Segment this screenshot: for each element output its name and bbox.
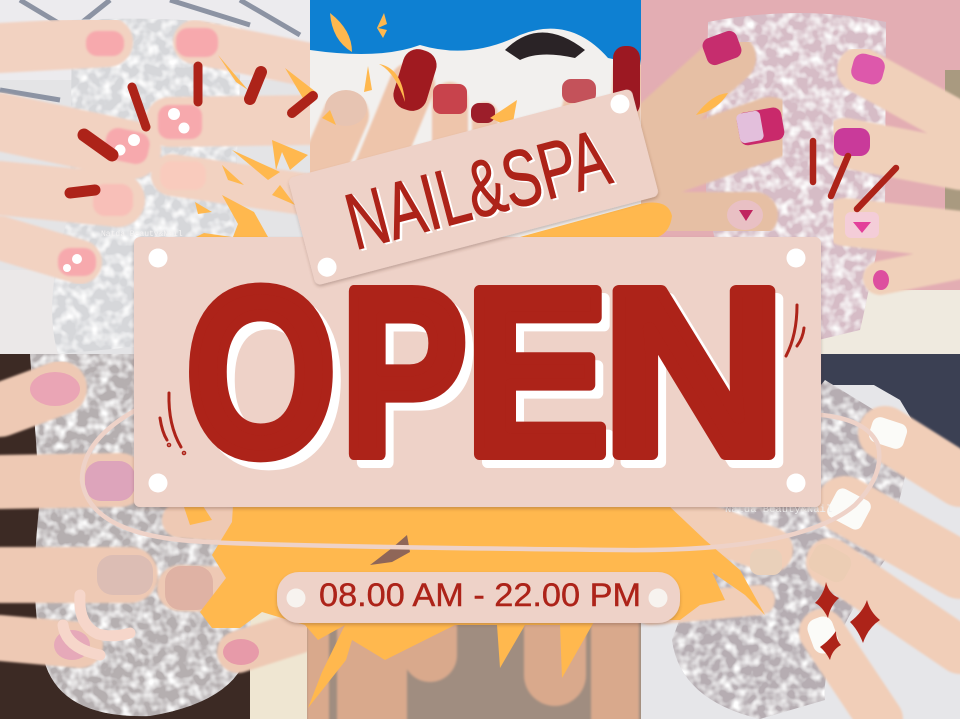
orange burst: behind hours pill	[184, 505, 765, 708]
red sparkles lower right	[815, 582, 880, 660]
photo: shimmer pink nails on dark background	[0, 354, 307, 719]
photo: deep red nails on blue and white	[310, 0, 641, 240]
heading shadow: OPEN: N	[610, 248, 794, 513]
main sign panel	[134, 237, 821, 507]
small sign: NAIL&SPA	[288, 88, 659, 286]
photo peek through burst	[370, 535, 410, 565]
hours pill	[277, 572, 680, 623]
orange burst: top leaves on photo	[330, 13, 728, 128]
photo: fingers on taupe fabric	[307, 623, 641, 719]
red accent strokes upper right	[813, 141, 896, 209]
photo: pink blush nails with flowers	[0, 0, 310, 354]
watermark text lower right: Natda Beauty&Nail	[725, 504, 832, 516]
photo: white and gold nails	[641, 354, 960, 719]
photo: magenta nails and pink glass	[641, 0, 960, 354]
heading shadow: OPEN: P	[349, 248, 475, 513]
doodle: right of OPEN	[786, 305, 804, 356]
heading: OPEN: N	[602, 240, 786, 505]
orange burst: behind small sign	[520, 202, 672, 237]
watermark text: Natda Beauty&Nail	[101, 230, 183, 239]
small sign top hole	[610, 94, 630, 114]
orange burst: upper left spikes	[195, 55, 336, 237]
heading: OPEN: E	[465, 240, 609, 505]
small sign heading: NAIL&SPA	[337, 112, 619, 267]
doodle: left of OPEN	[160, 393, 185, 454]
hours text: 08.00 AM - 22.00 PM	[319, 577, 641, 613]
doodle: pink arcs lower left	[63, 595, 130, 655]
heading: OPEN: O	[186, 240, 336, 505]
heading: OPEN: P	[341, 240, 467, 505]
heading shadow: OPEN: E	[473, 248, 617, 513]
doodle loop around sign	[82, 410, 879, 550]
heading shadow: OPEN: O	[194, 248, 344, 513]
red accent strokes around upper left nails	[70, 66, 313, 193]
small sign heading shadow: NAIL&SPA	[339, 114, 622, 268]
